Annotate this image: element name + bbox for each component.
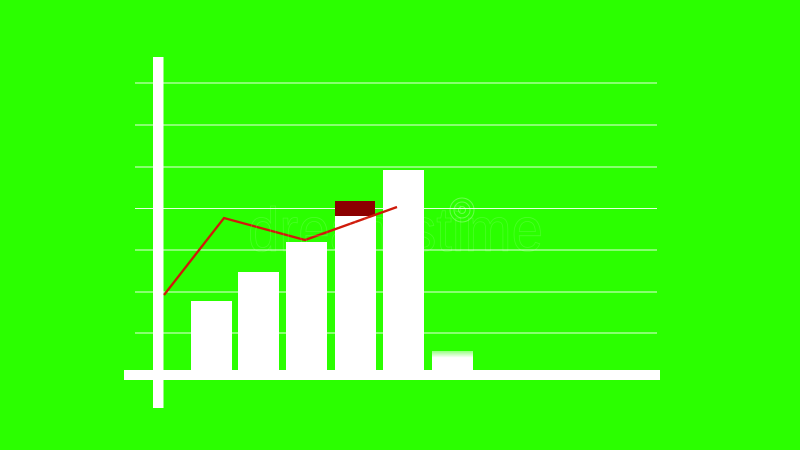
vertical axis [153,57,164,408]
red trend line [164,207,397,295]
bar 2 [238,272,279,373]
bar 5 [383,170,424,373]
watermark icon [450,198,474,222]
bar 6: rising, blurred top [432,351,473,373]
bars [191,170,473,373]
bar 1 [191,301,232,373]
dark red block [335,201,375,216]
bar 4 [335,215,376,373]
bar 3 [286,242,327,373]
horizontal axis [124,370,660,380]
watermark text: dreamstime [248,196,543,265]
